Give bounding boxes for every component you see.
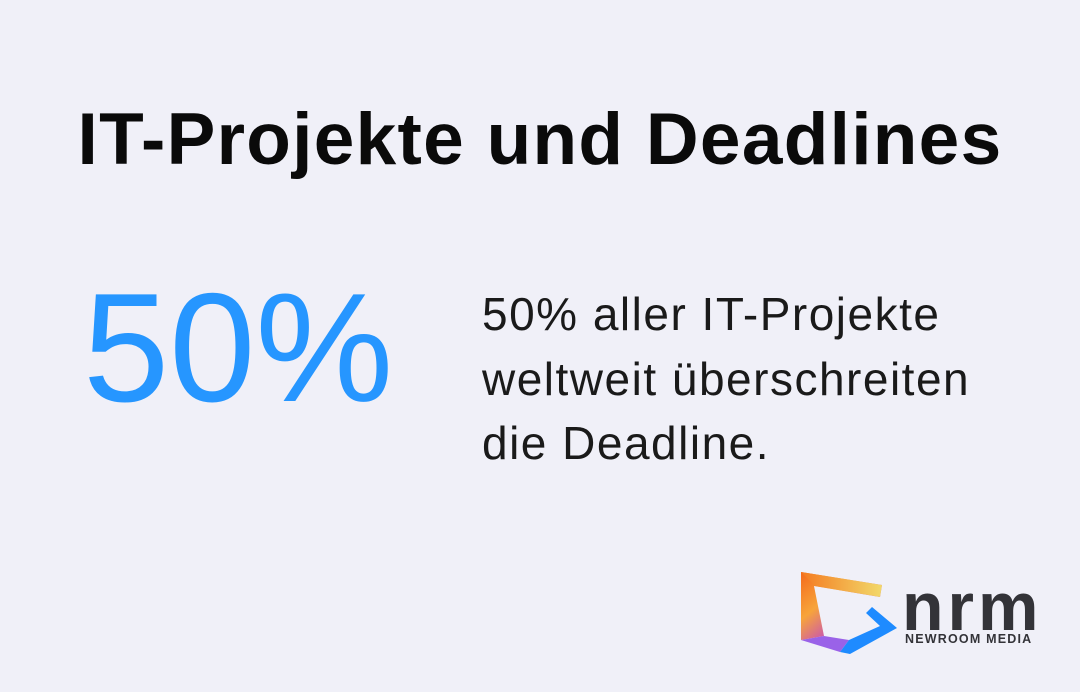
logo: newroom media [801, 569, 1042, 654]
text block: description [482, 288, 970, 469]
logo text: NEWROOM MEDIA: NEWROOM MEDIA [905, 632, 1032, 646]
text block: description: 50% aller IT-Projekte [482, 288, 940, 340]
text block: description: weltweit überschreiten [482, 352, 970, 404]
icon: nrm logo mark [801, 572, 897, 654]
logo text: nrm: nrm [902, 569, 1042, 645]
big stat: 50%: 50% [83, 261, 393, 434]
text block: description: die Deadline. [482, 417, 770, 469]
title: IT-Projekte und Deadlines [78, 99, 1002, 180]
